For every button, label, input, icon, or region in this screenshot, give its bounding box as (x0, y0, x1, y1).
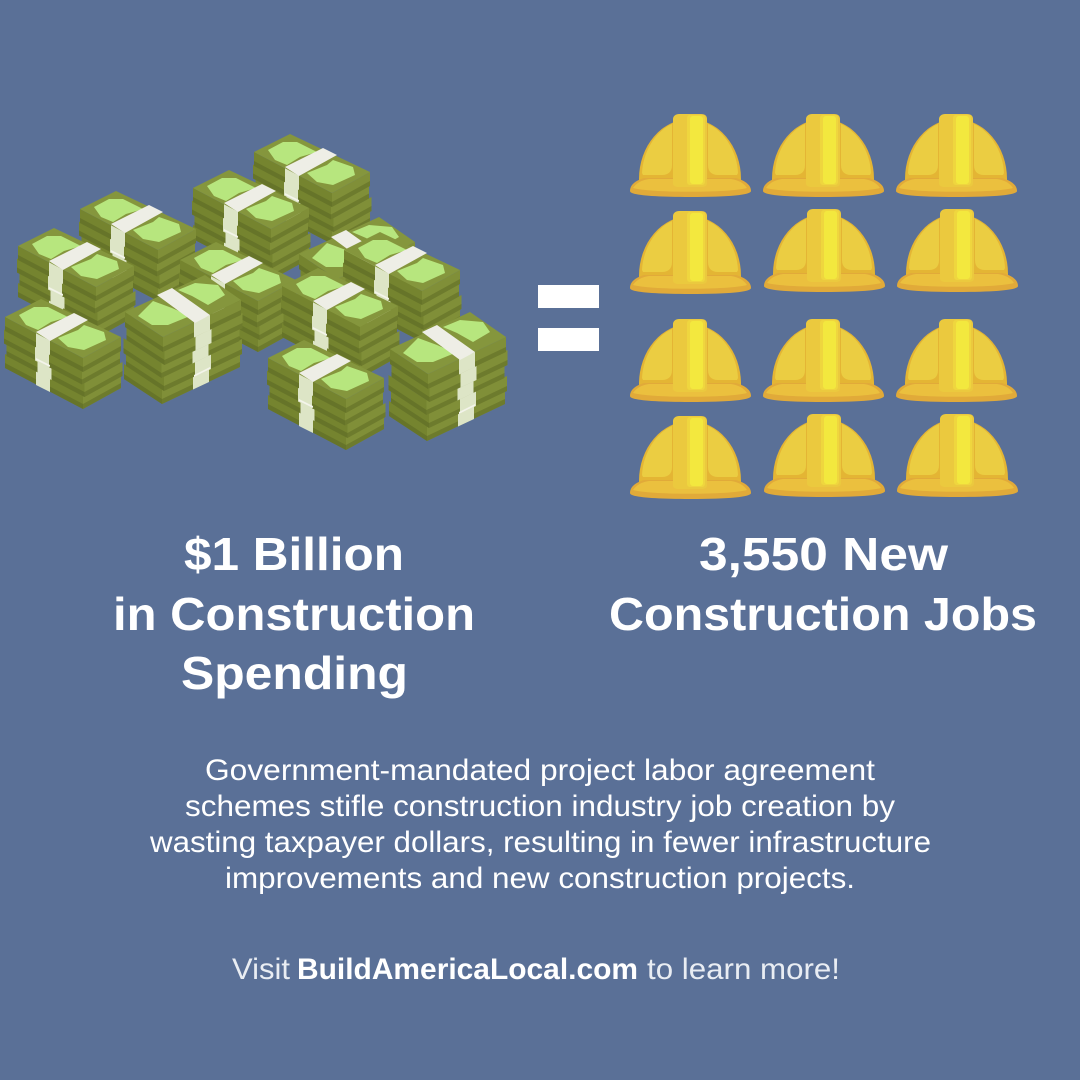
heading: 3,550 New Construction Jobs: Construction Jobs (609, 588, 1037, 640)
icon: equals sign (538, 285, 599, 351)
body text: Government-mandated project labor agreement (205, 754, 876, 787)
heading: 3,550 New Construction Jobs: 3,550 New (699, 528, 948, 580)
call to action (232, 953, 840, 986)
call to action: to learn more! (647, 953, 840, 986)
heading: 3,550 New Construction Jobs (609, 528, 1037, 640)
heading: $1 Billion in Construction Spending: Spending (181, 647, 408, 699)
call to action: Visit (232, 953, 291, 986)
body text: schemes stifle construction industry job creation by (185, 790, 895, 823)
call to action: BuildAmericaLocal.com (297, 953, 638, 986)
icon: pile of money stacks (4, 134, 508, 450)
body text (149, 754, 931, 895)
heading: $1 Billion in Construction Spending: $1 Billion (184, 528, 404, 580)
body text: wasting taxpayer dollars, resulting in fewer infrastructure (149, 826, 931, 859)
body text: improvements and new construction projects. (225, 862, 855, 895)
heading: $1 Billion in Construction Spending (113, 528, 475, 699)
heading: $1 Billion in Construction Spending: in Construction (113, 588, 475, 640)
icon: grid of twelve hard hats (630, 114, 1018, 541)
